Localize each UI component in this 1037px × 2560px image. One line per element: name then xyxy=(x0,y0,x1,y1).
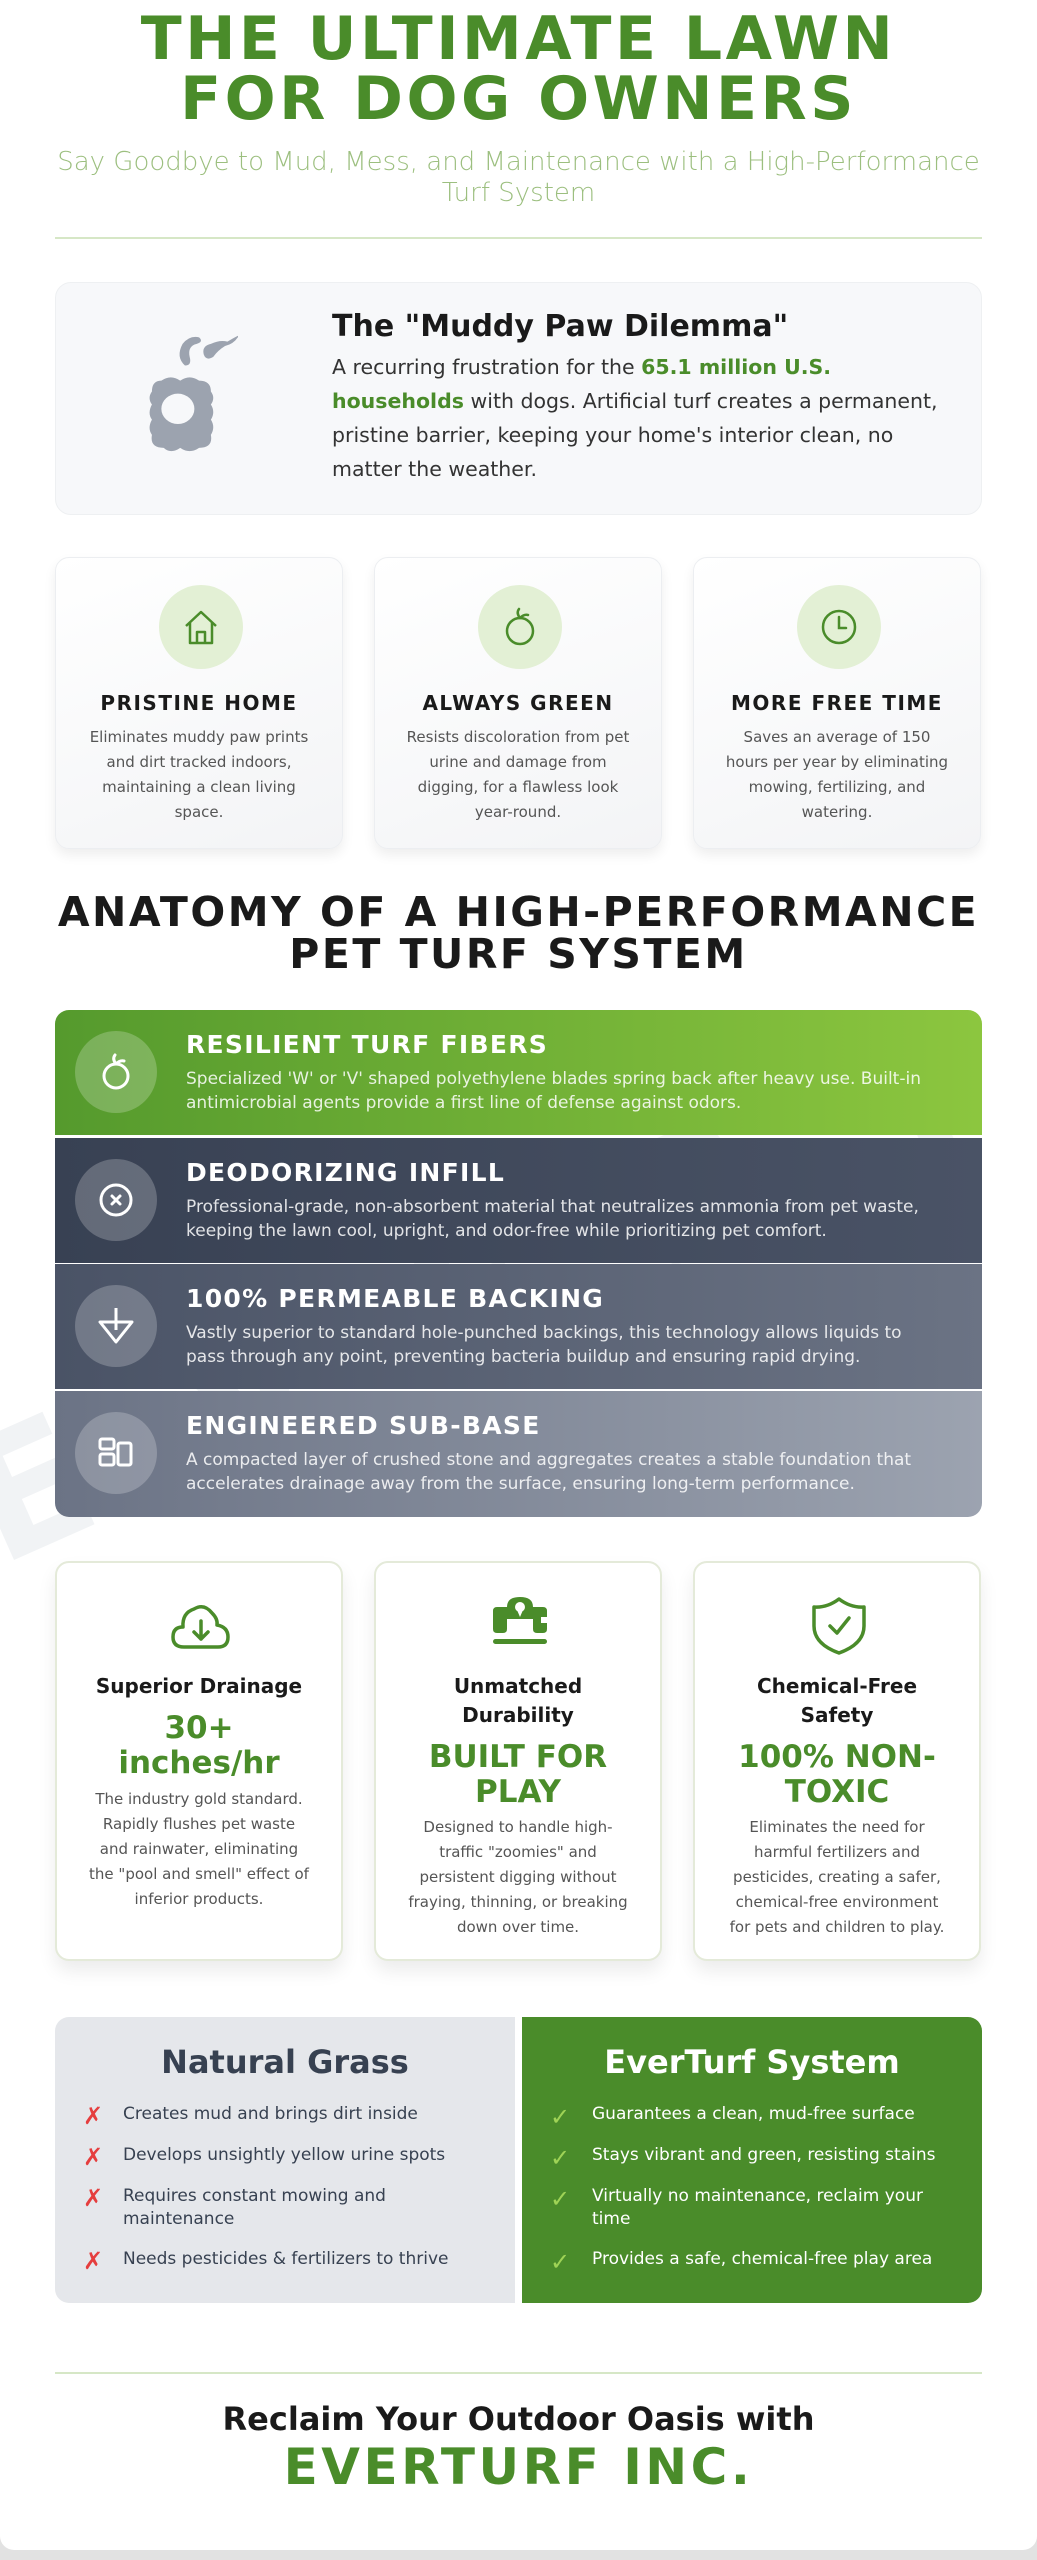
panel: natural grass comparison: Creates mud and brings dirt inside xyxy=(123,2104,418,2124)
panel: more free time: MORE FREE TIME xyxy=(731,691,943,715)
panel: unmatched durability: Unmatched xyxy=(454,1674,582,1698)
layer: deodorizing infill: DEODORIZING INFILL xyxy=(186,1158,505,1187)
layer: permeable backing xyxy=(55,1264,982,1389)
panel: everturf comparison: ✓ xyxy=(550,2144,570,2172)
subtitle: Turf System xyxy=(442,178,595,208)
panel: natural grass comparison: Develops unsightly yellow urine spots xyxy=(123,2145,445,2165)
panel: superior drainage xyxy=(55,1561,343,1961)
panel: superior drainage: 30+ xyxy=(164,1710,234,1746)
icon: sprout xyxy=(478,585,562,669)
icon: muddy paw xyxy=(150,336,238,452)
layer: deodorizing infill: Professional-grade, non-absorbent material that neutralizes ammonia from pet waste, keeping the lawn cool, upright, and odor-free while prioritizing pet comfort. xyxy=(186,1197,919,1241)
panel: chemical-free safety: Eliminates the need for harmful fertilizers and pesticides, creating a safer, chemical-free environment for pets and children to play. xyxy=(730,1818,944,1936)
panel: natural grass comparison: Needs pesticides & fertilizers to thrive xyxy=(123,2249,448,2269)
icon: cloud download xyxy=(171,1605,230,1649)
layer: engineered sub-base: A compacted layer of crushed stone and aggregates creates a stable foundation that accelerates drainage away from the surface, ensuring long-term performance. xyxy=(186,1450,911,1494)
panel: always green xyxy=(374,557,662,849)
panel: more free time xyxy=(693,557,981,849)
heading: anatomy: PET TURF SYSTEM xyxy=(289,930,748,978)
panel: everturf comparison: Provides a safe, chemical-free play area xyxy=(592,2249,932,2269)
heading: The "Muddy Paw Dilemma" xyxy=(332,309,788,344)
panel: pristine home: PRISTINE HOME xyxy=(100,691,298,715)
panel: everturf comparison xyxy=(522,2017,982,2303)
panel: natural grass comparison: Natural Grass xyxy=(161,2043,409,2081)
panel: everturf comparison: Stays vibrant and green, resisting stains xyxy=(592,2145,935,2165)
subtitle: Say Goodbye to Mud, Mess, and Maintenance with a High-Performance xyxy=(57,147,980,177)
layer: resilient turf fibers: RESILIENT TURF FIBERS xyxy=(186,1030,548,1059)
panel: pristine home: Eliminates muddy paw prints and dirt tracked indoors, maintaining a clean living space. xyxy=(90,728,308,821)
panel: unmatched durability xyxy=(374,1561,662,1961)
panel: everturf comparison: ✓ xyxy=(550,2103,570,2131)
icon: house xyxy=(159,585,243,669)
panel: superior drainage: The industry gold standard. Rapidly flushes pet waste and rainwater, eliminating the "pool and smell" effect of inferior products. xyxy=(89,1790,309,1908)
panel: pristine home xyxy=(55,557,343,849)
panel: chemical-free safety: Chemical-Free xyxy=(757,1674,917,1698)
layer: resilient turf fibers xyxy=(55,1010,982,1135)
text block: A recurring frustration for the 65.1 million U.S. households with dogs. Artificial turf creates a permanent, pristine barrier, keeping your home's interior clean, no matter the weather. xyxy=(332,355,938,481)
panel: natural grass comparison: ✗ xyxy=(83,2247,103,2275)
layer: engineered sub-base xyxy=(55,1391,982,1517)
panel: natural grass comparison xyxy=(55,2017,515,2303)
layer: engineered sub-base: ENGINEERED SUB-BASE xyxy=(186,1411,541,1440)
footer heading: Reclaim Your Outdoor Oasis with xyxy=(223,2400,814,2438)
icon: shield check xyxy=(812,1597,866,1655)
layer: permeable backing: Vastly superior to standard hole-punched backings, this technology allows liquids to pass through any point, preventing bacteria buildup and ensuring rapid drying. xyxy=(186,1323,902,1367)
panel: natural grass comparison: ✗ xyxy=(83,2184,103,2212)
panel: more free time: Saves an average of 150 hours per year by eliminating mowing, fertilizing, and watering. xyxy=(726,728,948,821)
panel: everturf comparison: Virtually no maintenance, reclaim your time xyxy=(592,2186,923,2229)
panel: everturf comparison: EverTurf System xyxy=(604,2043,900,2081)
panel: always green: Resists discoloration from pet urine and damage from digging, for a flawless look year-round. xyxy=(407,728,629,821)
panel: unmatched durability: Designed to handle high-traffic "zoomies" and persistent digging without fraying, thinning, or breaking down over time. xyxy=(408,1818,628,1936)
panel: chemical-free safety: Safety xyxy=(801,1703,873,1727)
panel: unmatched durability: Durability xyxy=(462,1703,574,1727)
title: FOR DOG OWNERS xyxy=(180,64,857,134)
heading: anatomy: ANATOMY OF A HIGH-PERFORMANCE xyxy=(58,888,979,936)
subtitle xyxy=(57,147,980,208)
panel: everturf comparison: ✓ xyxy=(550,2185,570,2213)
icon: clock xyxy=(797,585,881,669)
layer: deodorizing infill xyxy=(55,1138,982,1263)
panel: natural grass comparison: Requires constant mowing and maintenance xyxy=(123,2186,386,2229)
panel: natural grass comparison: ✗ xyxy=(83,2102,103,2130)
icon: dog toy xyxy=(493,1597,547,1644)
layer: permeable backing: 100% PERMEABLE BACKING xyxy=(186,1284,604,1313)
panel: superior drainage: inches/hr xyxy=(118,1745,280,1781)
heading: anatomy xyxy=(58,888,979,978)
panel: unmatched durability: PLAY xyxy=(475,1774,561,1810)
panel: chemical-free safety xyxy=(693,1561,981,1961)
panel: chemical-free safety: TOXIC xyxy=(785,1774,889,1810)
panel: muddy paw dilemma xyxy=(55,282,982,515)
panel: everturf comparison: Guarantees a clean, mud-free surface xyxy=(592,2104,915,2124)
title: THE ULTIMATE LAWN xyxy=(141,4,896,74)
footer brand: EVERTURF INC. xyxy=(284,2438,753,2496)
panel: turf layers xyxy=(55,1010,982,1517)
panel: everturf comparison: ✓ xyxy=(550,2248,570,2276)
title xyxy=(141,4,896,134)
panel: always green: ALWAYS GREEN xyxy=(422,691,614,715)
panel: natural grass comparison: ✗ xyxy=(83,2143,103,2171)
panel: chemical-free safety: 100% NON- xyxy=(738,1739,936,1775)
layer: resilient turf fibers: Specialized 'W' or 'V' shaped polyethylene blades spring back after heavy use. Built-in antimicrobial agents provide a first line of defense against odors. xyxy=(186,1069,921,1113)
panel: unmatched durability: BUILT FOR xyxy=(429,1739,607,1775)
panel: superior drainage: Superior Drainage xyxy=(96,1674,302,1698)
